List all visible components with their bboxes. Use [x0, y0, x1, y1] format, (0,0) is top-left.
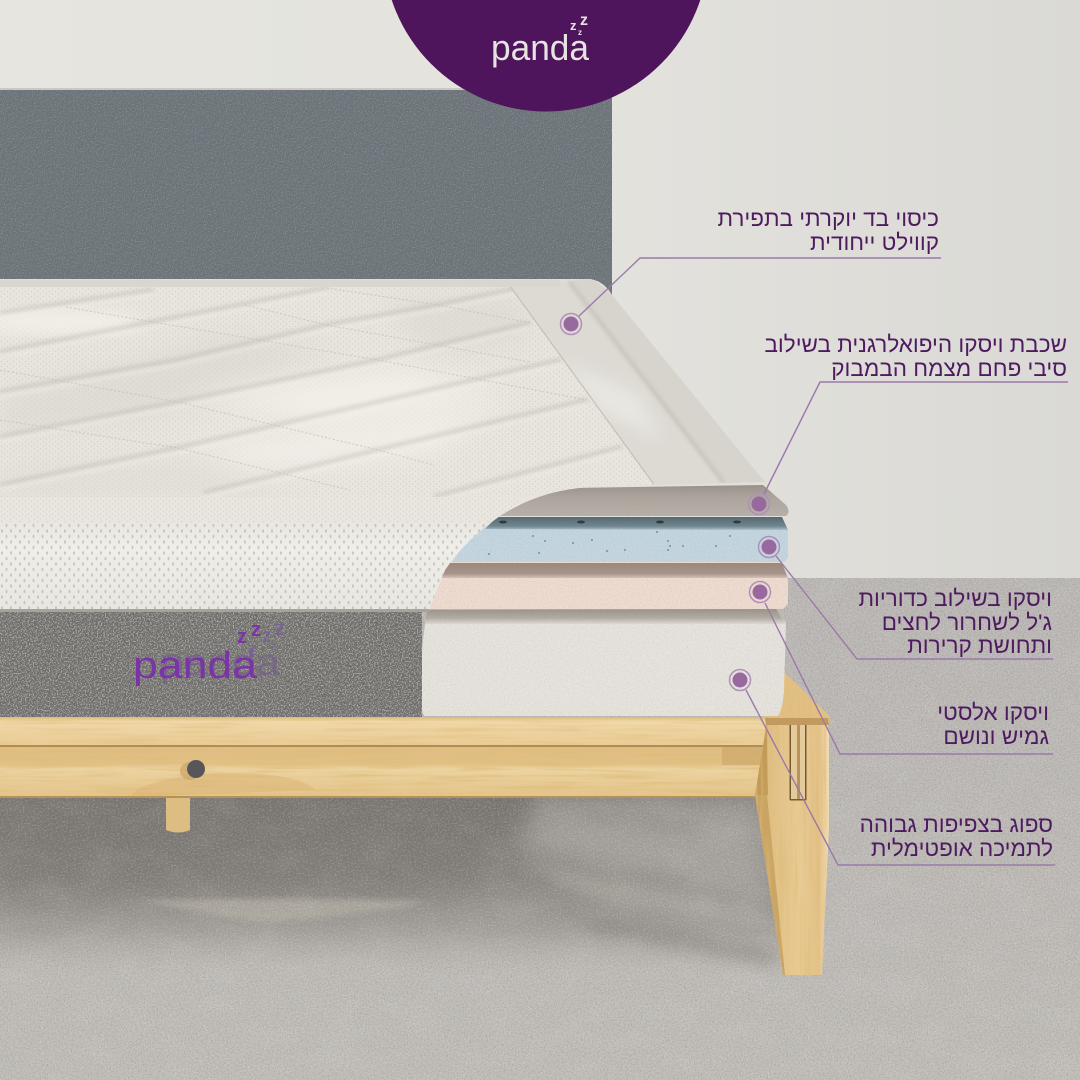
callout: high-density foam: ספוג בצפיפות גבוהה	[860, 812, 1053, 837]
callout: gel layer	[758, 536, 1053, 659]
mattress side logo	[133, 618, 285, 687]
callout: elastic layer: ויסקו אלסטי	[937, 700, 1049, 725]
mattress side logo: z	[271, 639, 277, 653]
callout: hypoallergenic layer: שכבת ויסקו היפואלרגנית בשילוב	[764, 332, 1067, 357]
callout: gel layer: ג'ל לשחרור לחצים	[882, 610, 1052, 635]
callout: high-density foam: לתמיכה אופטימלית	[871, 836, 1053, 861]
cover border band	[591, 279, 718, 485]
cover front face	[492, 504, 520, 522]
bed frame rear side rail	[764, 672, 829, 726]
callout: quilted cover	[560, 206, 941, 334]
mattress side logo: z	[251, 619, 261, 641]
wall background	[0, 0, 1080, 600]
mattress side logo: z	[237, 626, 247, 648]
foam texture	[422, 520, 788, 716]
knob	[180, 760, 205, 780]
logo badge: z	[578, 28, 582, 37]
mattress side fabric	[0, 612, 422, 718]
logo badge: z	[570, 18, 577, 33]
quilted cover	[0, 278, 800, 618]
callout: high-density foam	[730, 670, 1055, 865]
callout: quilted cover: קווילט ייחודית	[810, 230, 939, 255]
logo badge: panda	[491, 27, 590, 68]
mattress side logo: panda	[160, 642, 281, 684]
callout: quilted cover: כיסוי בד יוקרתי בתפירת	[718, 206, 939, 231]
corner leg	[755, 718, 829, 975]
headboard	[0, 88, 612, 298]
floor	[0, 578, 1080, 1080]
quilt panel	[0, 280, 680, 501]
short centre leg	[166, 798, 190, 832]
mattress side logo: panda	[133, 645, 258, 687]
bed frame upper rail	[0, 717, 768, 747]
callout: gel layer: ויסקו בשילוב כדוריות	[858, 586, 1052, 611]
white base foam layer	[420, 609, 786, 716]
logo badge	[384, 0, 708, 112]
top hypoallergenic charcoal layer	[498, 485, 788, 516]
logo badge: z	[580, 12, 588, 29]
pink comfort layer	[428, 562, 788, 609]
blue gel layer	[452, 517, 788, 562]
mattress side logo: z	[275, 618, 285, 640]
callout: hypoallergenic layer: סיבי פחם מצמח הבמבוק	[831, 356, 1067, 381]
callout: gel layer: ותחושת קרירות	[907, 633, 1052, 658]
mattress side logo: z	[262, 626, 272, 647]
bed frame lower rail	[0, 746, 766, 798]
mattress side logo: z	[248, 639, 257, 659]
callout: hypoallergenic layer	[748, 332, 1068, 514]
callout: elastic layer	[750, 582, 1053, 754]
callout: elastic layer: גמיש ונושם	[943, 724, 1049, 749]
